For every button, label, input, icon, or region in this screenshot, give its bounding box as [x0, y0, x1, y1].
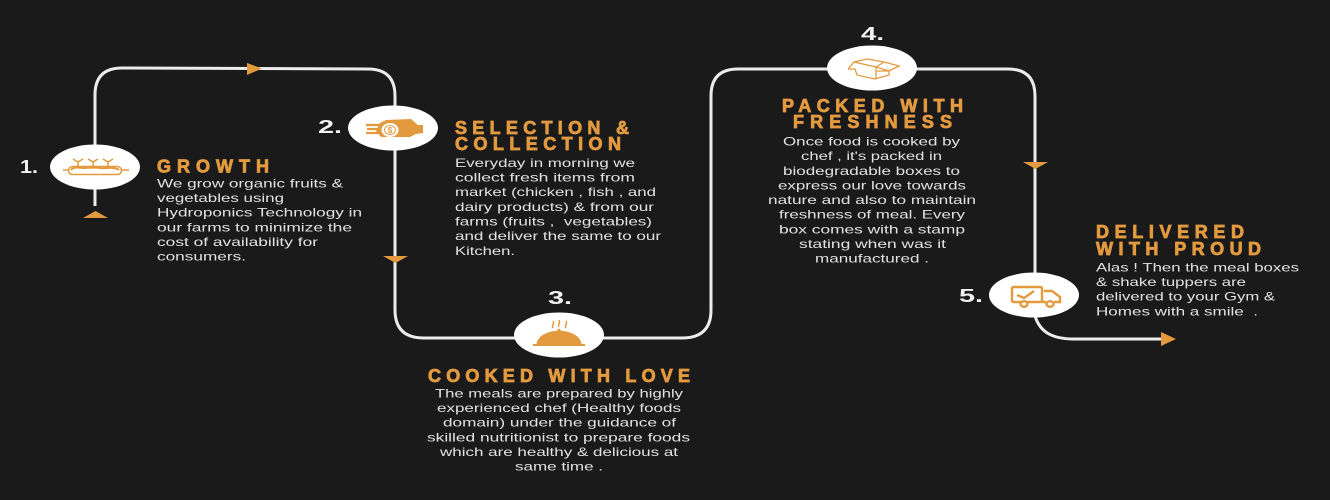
packed description: Once food is cooked by	[783, 134, 960, 148]
delivered description: Alas ! Then the meal boxes	[1096, 260, 1299, 274]
number 5: 5.	[959, 286, 983, 306]
growth description: cost of availability for	[157, 235, 318, 249]
step 1: growth	[20, 144, 362, 264]
packed description: biodegradable boxes to	[783, 164, 960, 178]
step 5: delivered with proud	[959, 222, 1299, 318]
number 1: 1.	[20, 157, 38, 177]
cooked description: which are healthy & delicious at	[439, 445, 679, 459]
circle 2	[348, 106, 438, 150]
cooked description: same time .	[515, 460, 603, 474]
selection description: market (chicken , fish , and	[455, 185, 656, 199]
arrow: step 2 down	[383, 256, 408, 263]
heading: packed with freshness: FRESHNESS	[793, 112, 952, 132]
growth description: vegetables using	[157, 191, 284, 205]
growth description: our farms to minimize the	[157, 220, 352, 234]
icon: open box	[848, 59, 899, 79]
heading: selection and collection	[455, 118, 629, 154]
heading: cooked with love: COOKED WITH LOVE	[428, 366, 690, 386]
process path line	[95, 68, 1166, 339]
number 4: 4.	[861, 24, 884, 44]
delivered description: delivered to your Gym &	[1096, 290, 1275, 304]
delivered description: & shake tuppers are	[1096, 275, 1246, 289]
circle 4	[827, 46, 917, 90]
heading: packed with freshness	[782, 96, 963, 132]
heading: delivered with proud: WITH PROUD	[1096, 239, 1261, 259]
heading: selection and collection: SELECTION &	[455, 118, 629, 138]
delivered description	[1096, 260, 1299, 318]
heading: packed with freshness: PACKED WITH	[782, 96, 963, 116]
step 3: cooked with love	[427, 288, 690, 474]
packed description	[768, 134, 976, 266]
arrow: top right	[247, 63, 262, 75]
cooked description	[427, 386, 690, 474]
cooked description: experienced chef (Healthy foods	[437, 401, 681, 415]
selection description: farms (fruits , vegetables)	[455, 214, 652, 228]
arrow: step 4 down	[1023, 162, 1048, 169]
circle 3	[514, 312, 604, 358]
number 2: 2.	[318, 117, 342, 137]
selection description	[455, 156, 661, 258]
circle 1	[50, 144, 140, 190]
arrow: start up	[83, 211, 108, 218]
packed description: express our love towards	[778, 178, 966, 192]
arrow: final right	[1161, 332, 1176, 346]
heading: delivered with proud: DELIVERED	[1096, 222, 1244, 242]
icon: food cloche	[533, 320, 585, 346]
icon: hand with coin: $	[388, 126, 393, 135]
heading: selection and collection: COLLECTION	[455, 134, 621, 154]
icon: hand with coin	[366, 119, 423, 137]
heading: growth: GROWTH	[157, 157, 269, 177]
delivered description: Homes with a smile .	[1096, 304, 1258, 318]
selection description: collect fresh items from	[455, 170, 635, 184]
cooked description: The meals are prepared by highly	[435, 386, 683, 400]
step 2: selection and collection	[318, 106, 661, 258]
circle 5	[989, 272, 1079, 318]
growth description	[157, 176, 362, 264]
heading: delivered with proud	[1096, 222, 1261, 259]
step 4: packed with freshness	[768, 24, 976, 266]
icon: delivery truck	[1012, 287, 1060, 307]
packed description: box comes with a stamp	[779, 222, 965, 236]
selection description: Everyday in morning we	[455, 156, 635, 170]
cooked description: domain) under the guidance of	[443, 416, 677, 430]
packed description: nature and also to maintain	[768, 193, 976, 207]
packed description: chef , it's packed in	[801, 149, 942, 163]
growth description: consumers.	[157, 250, 246, 264]
packed description: manufactured .	[815, 252, 929, 266]
growth description: Hydroponics Technology in	[157, 206, 362, 220]
selection description: and deliver the same to our	[455, 229, 661, 243]
cooked description: skilled nutritionist to prepare foods	[427, 430, 690, 444]
selection description: dairy products) & from our	[455, 200, 654, 214]
packed description: freshness of meal. Every	[779, 208, 965, 222]
icon: hydroponic plants	[63, 159, 129, 174]
packed description: stating when was it	[799, 237, 947, 251]
selection description: Kitchen.	[455, 244, 515, 258]
growth description: We grow organic fruits &	[157, 176, 343, 190]
number 3: 3.	[548, 288, 572, 308]
